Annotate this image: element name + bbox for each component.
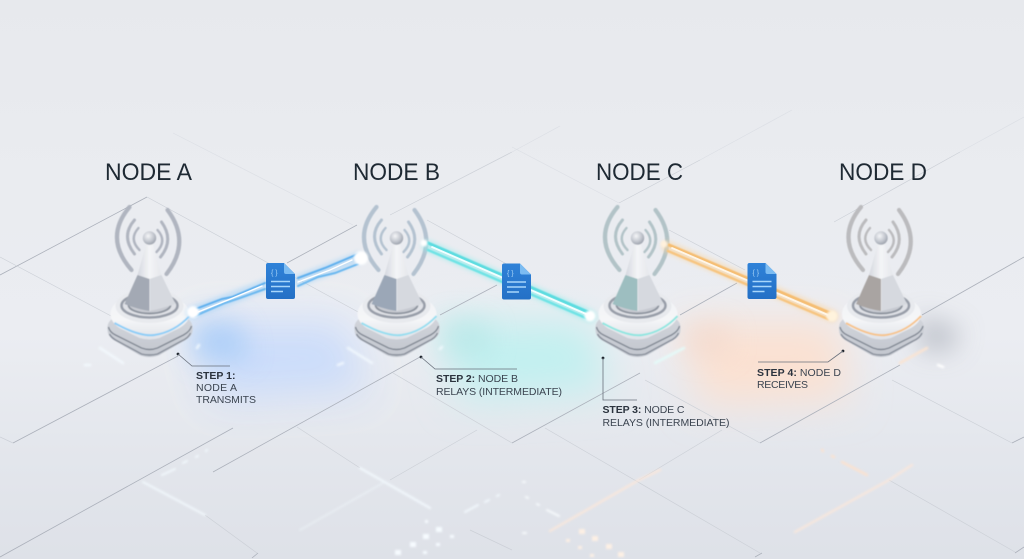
floor glow: blue (192, 322, 368, 400)
beam: A to B (187, 251, 368, 318)
icon: document packet 3 (748, 263, 776, 299)
icon: document packet 1 (266, 263, 295, 299)
icon: document packet 1: { } (271, 270, 278, 277)
base glow B (362, 316, 436, 335)
callout: step 2 (420, 356, 562, 398)
floor grid lines (0, 197, 1024, 558)
heading: NODE D: NODE D (839, 159, 927, 186)
heading: NODE A: NODE A (105, 159, 192, 186)
callout: step 3: RELAYS (INTERMEDIATE) (602, 417, 730, 429)
base glow D (846, 316, 921, 335)
callout: step 2: STEP 2: NODE B (436, 373, 518, 385)
callout: step 2: RELAYS (INTERMEDIATE) (436, 386, 562, 398)
beam: C to D (660, 240, 838, 322)
callout: step 4: RECEIVES (757, 379, 808, 391)
floor light streaks: warm (523, 348, 943, 533)
floor light streaks: cool (85, 345, 499, 530)
heading: NODE B: NODE B (353, 159, 440, 186)
base glow A (114, 316, 190, 335)
heading: NODE C: NODE C (596, 159, 683, 186)
shadow of node D (918, 315, 962, 352)
callout: step 1 (177, 353, 256, 406)
base glow C (602, 316, 678, 335)
callout: step 4: STEP 4: NODE D (757, 367, 841, 379)
beam: B to C (420, 240, 596, 322)
tower: node C (595, 207, 681, 357)
callout: step 3 (602, 357, 730, 429)
tower: node D (839, 207, 924, 357)
very faint upper grid lines (173, 110, 1024, 225)
callout: step 1: TRANSMITS (196, 394, 256, 406)
icon: document packet 2: { } (507, 270, 514, 278)
icon: document packet 3: { } (752, 270, 760, 277)
tower: node B (354, 207, 440, 357)
callout: step 4 (757, 350, 844, 391)
floor light dots: cool (395, 520, 454, 555)
callout: step 1: STEP 1: (196, 370, 236, 382)
tower: node A (107, 207, 193, 357)
floor glow: teal (440, 318, 610, 400)
callout: step 1: NODE A (196, 382, 237, 394)
icon: document packet 2 (502, 264, 531, 300)
faint floor grid lines (0, 152, 1015, 553)
floor light dots: warm (566, 529, 624, 557)
callout: step 3: STEP 3: NODE C (602, 404, 685, 416)
floor glow: peach (682, 322, 850, 405)
